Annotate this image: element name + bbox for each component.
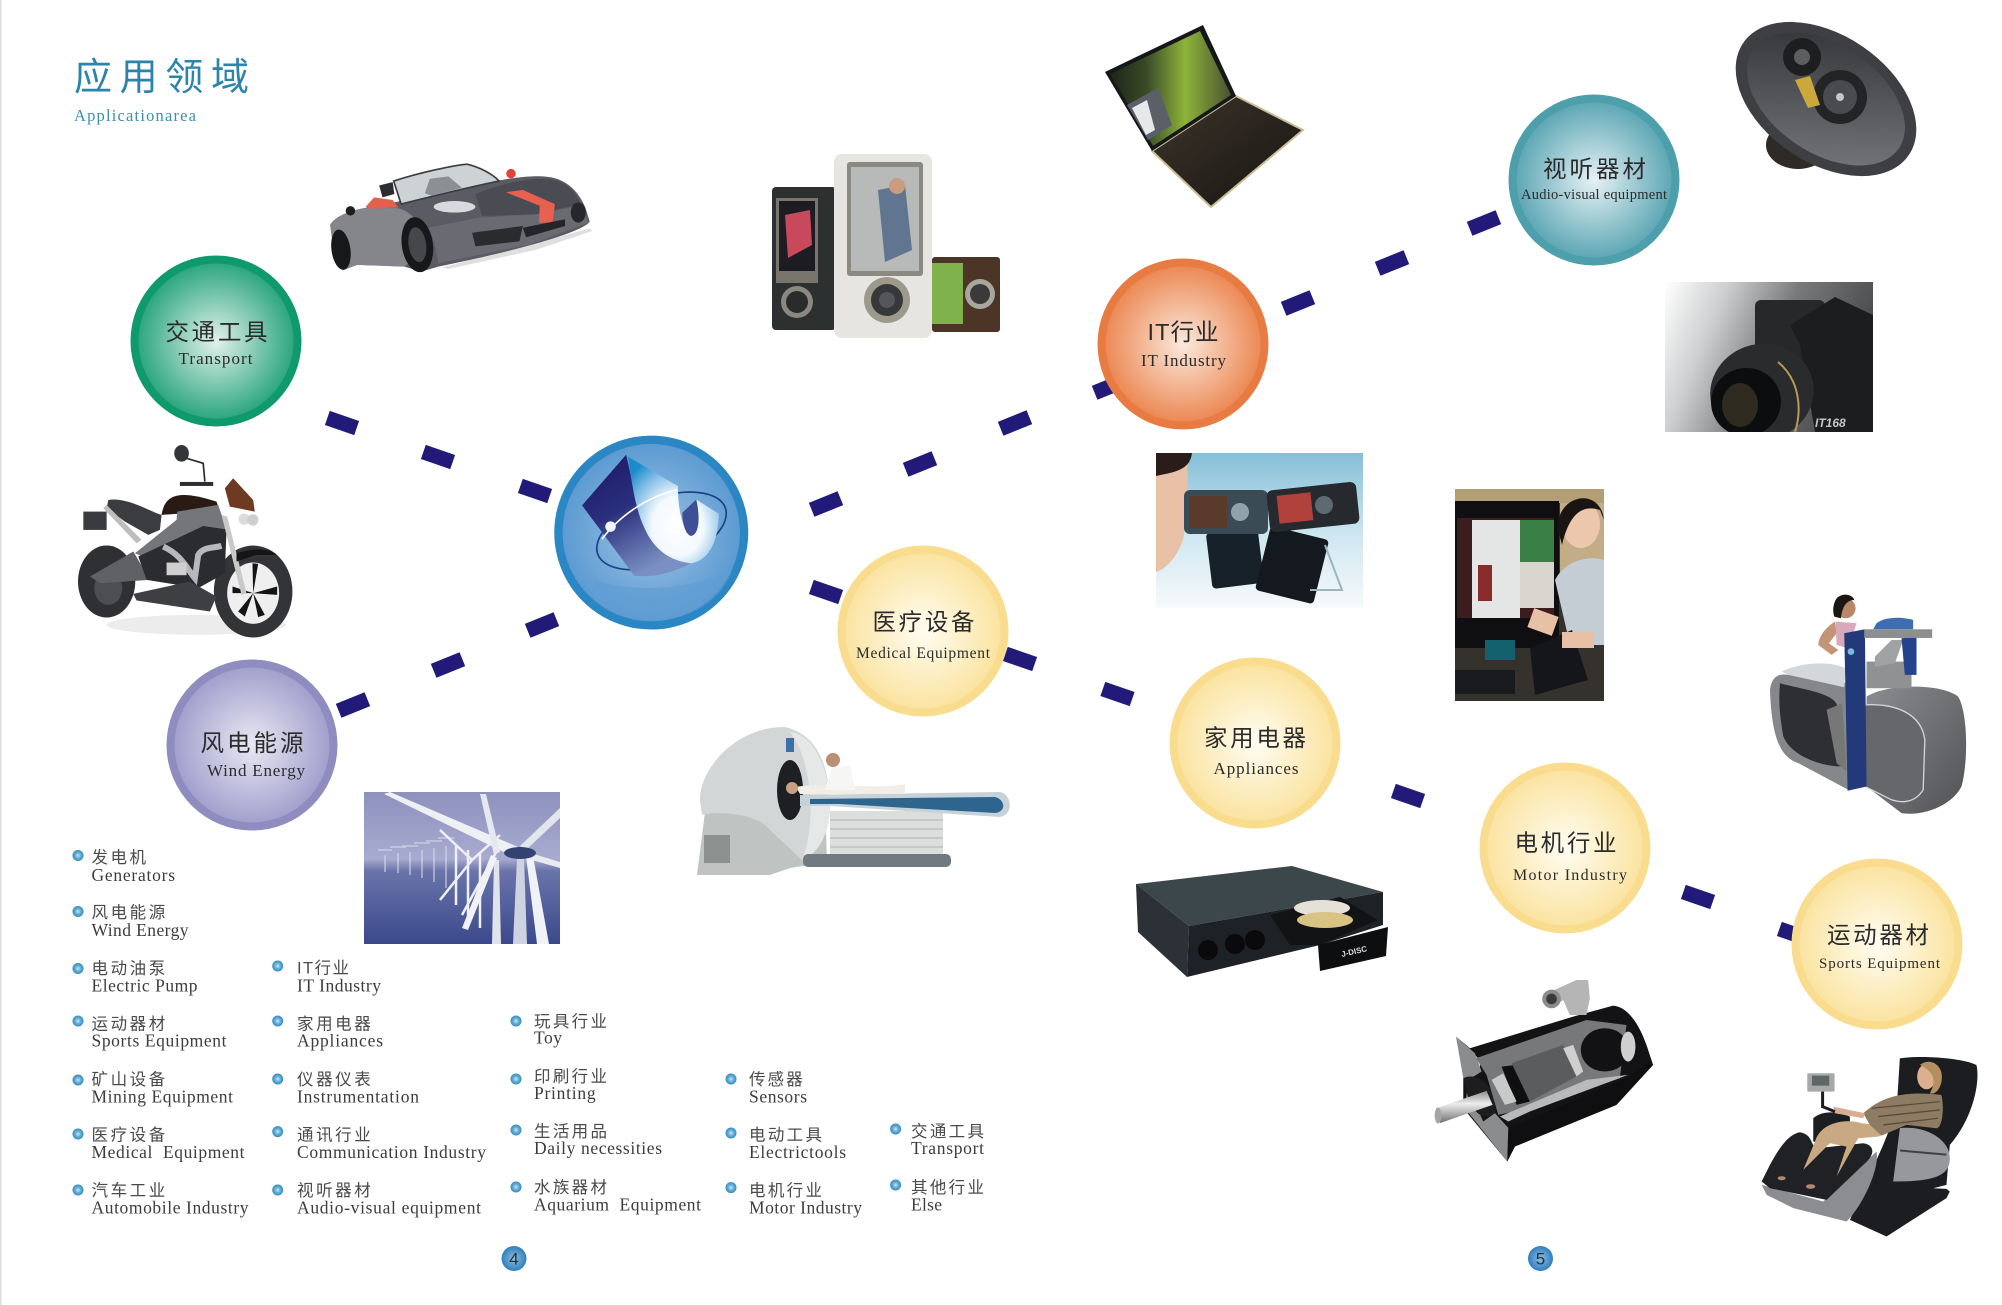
list column 3: 印刷行业 — [534, 1067, 607, 1086]
list column 1: 风电能源 — [92, 903, 165, 922]
list column 1: 汽车工业 — [92, 1181, 165, 1200]
list column 1: Mining Equipment — [92, 1086, 233, 1106]
circle: motor industry: 电机行业 — [1514, 830, 1616, 856]
list column 3: Toy — [534, 1028, 562, 1048]
list column 4: 电动工具 — [749, 1126, 822, 1144]
list column 1: 医疗设备 — [92, 1126, 166, 1144]
list column 1: 矿山设备 — [92, 1070, 166, 1089]
circle: medical equipment: Medical Equipment — [856, 645, 991, 662]
list column 5: Transport — [911, 1138, 984, 1158]
list column 1: Sports Equipment — [92, 1030, 227, 1050]
list column 5: 其他行业 — [911, 1178, 984, 1197]
photo: woman at monitor — [1455, 489, 1604, 701]
list column 4: Motor Industry — [749, 1198, 862, 1218]
central logo sphere — [554, 436, 748, 630]
circle: audio-visual equipment: Audio-visual equipment — [1521, 187, 1667, 203]
photo: laptop — [1105, 25, 1303, 207]
circle: sports equipment: Sports Equipment — [1819, 956, 1941, 972]
list column 3: Aquarium Equipment — [534, 1194, 701, 1214]
connector dashes — [325, 210, 1811, 946]
circle: appliances — [1170, 658, 1340, 828]
photo: sports car — [329, 164, 592, 274]
photo: wind turbines — [364, 792, 560, 944]
circle: motor industry: Motor Industry — [1513, 867, 1627, 884]
list column 1: Automobile Industry — [92, 1198, 249, 1218]
circle: IT industry — [1098, 258, 1268, 430]
list column 2: 家用电器 — [297, 1014, 371, 1034]
photo: camera — [1665, 282, 1873, 432]
list column 4: 电机行业 — [749, 1181, 822, 1200]
list column 4: Sensors — [749, 1086, 807, 1106]
list column 3: 水族器材 — [534, 1178, 607, 1197]
list column 4 — [726, 1070, 862, 1218]
list column 3: 玩具行业 — [534, 1012, 607, 1031]
list column 2: IT行业 — [297, 958, 349, 978]
circle: IT industry: IT Industry — [1141, 351, 1226, 370]
list column 3: Daily necessities — [534, 1138, 662, 1158]
list column 5 — [890, 1122, 984, 1214]
circle: sports equipment — [1792, 858, 1962, 1030]
circle: IT industry: IT行业 — [1148, 319, 1218, 345]
photo: treadmill — [1770, 595, 1966, 814]
list column 2 — [272, 958, 486, 1218]
circle: motor industry — [1480, 762, 1650, 934]
photo: CT scanner — [697, 727, 1010, 875]
circle: audio-visual equipment: 视听器材 — [1543, 156, 1646, 182]
list column 1: Medical Equipment — [92, 1142, 245, 1162]
circle: audio-visual equipment — [1508, 94, 1680, 266]
list column 3: Printing — [534, 1083, 596, 1103]
page number 4 — [502, 1246, 526, 1271]
list column 1: 发电机 — [92, 848, 146, 867]
photo: media players — [772, 154, 1000, 338]
list column 2: Audio-visual equipment — [297, 1198, 481, 1218]
list column 1: Electric Pump — [92, 976, 198, 996]
list column 3: 生活用品 — [534, 1122, 607, 1141]
list column 1: 电动油泵 — [92, 959, 165, 978]
circle: transport: 交通工具 — [166, 319, 268, 345]
photo: disc player: J-DISC — [1340, 944, 1368, 959]
page number 5: 5 — [1536, 1250, 1545, 1268]
photo: massage chair — [1762, 1057, 1977, 1236]
title — [74, 57, 249, 125]
circle: medical equipment — [838, 546, 1008, 716]
list column 5: 交通工具 — [911, 1122, 984, 1141]
list column 5: Else — [911, 1194, 942, 1214]
title: 应用领域 — [74, 57, 249, 99]
page number 4: 4 — [509, 1250, 519, 1268]
photo: motor cutaway — [1435, 980, 1653, 1161]
list column 1: Wind Energy — [92, 920, 189, 940]
circle: wind energy — [166, 660, 338, 830]
page number 5 — [1528, 1246, 1553, 1271]
photo: speaker — [1707, 0, 1945, 208]
circle: transport: Transport — [178, 349, 253, 368]
list column 1: 运动器材 — [92, 1014, 165, 1034]
circle: appliances: 家用电器 — [1204, 725, 1306, 751]
title: Applicationarea — [74, 106, 197, 125]
photo: disc player — [1136, 866, 1388, 977]
list column 3 — [510, 1012, 701, 1214]
application list — [72, 848, 984, 1218]
list column 2: Instrumentation — [297, 1086, 419, 1106]
photo: motorcycle — [78, 445, 292, 637]
list column 4: 传感器 — [749, 1070, 803, 1089]
list column 1 — [72, 848, 249, 1218]
circle: transport — [130, 256, 302, 426]
list column 2: 视听器材 — [297, 1181, 371, 1200]
circle: wind energy: Wind Energy — [207, 761, 306, 780]
photo: mobile phones — [1156, 453, 1363, 608]
list column 2: Communication Industry — [297, 1142, 486, 1162]
list column 1: Generators — [92, 865, 175, 885]
circle: medical equipment: 医疗设备 — [872, 609, 974, 635]
circle: sports equipment: 运动器材 — [1827, 922, 1929, 948]
photo: camera: IT168 — [1815, 416, 1846, 430]
circle: appliances: Appliances — [1214, 759, 1298, 778]
page edge line — [0, 0, 2, 1305]
list column 2: Appliances — [297, 1030, 383, 1050]
list column 2: IT Industry — [297, 976, 381, 996]
list column 2: 仪器仪表 — [297, 1070, 371, 1089]
circle: wind energy: 风电能源 — [200, 730, 304, 756]
list column 2: 通讯行业 — [297, 1126, 371, 1144]
list column 4: Electrictools — [749, 1142, 846, 1162]
